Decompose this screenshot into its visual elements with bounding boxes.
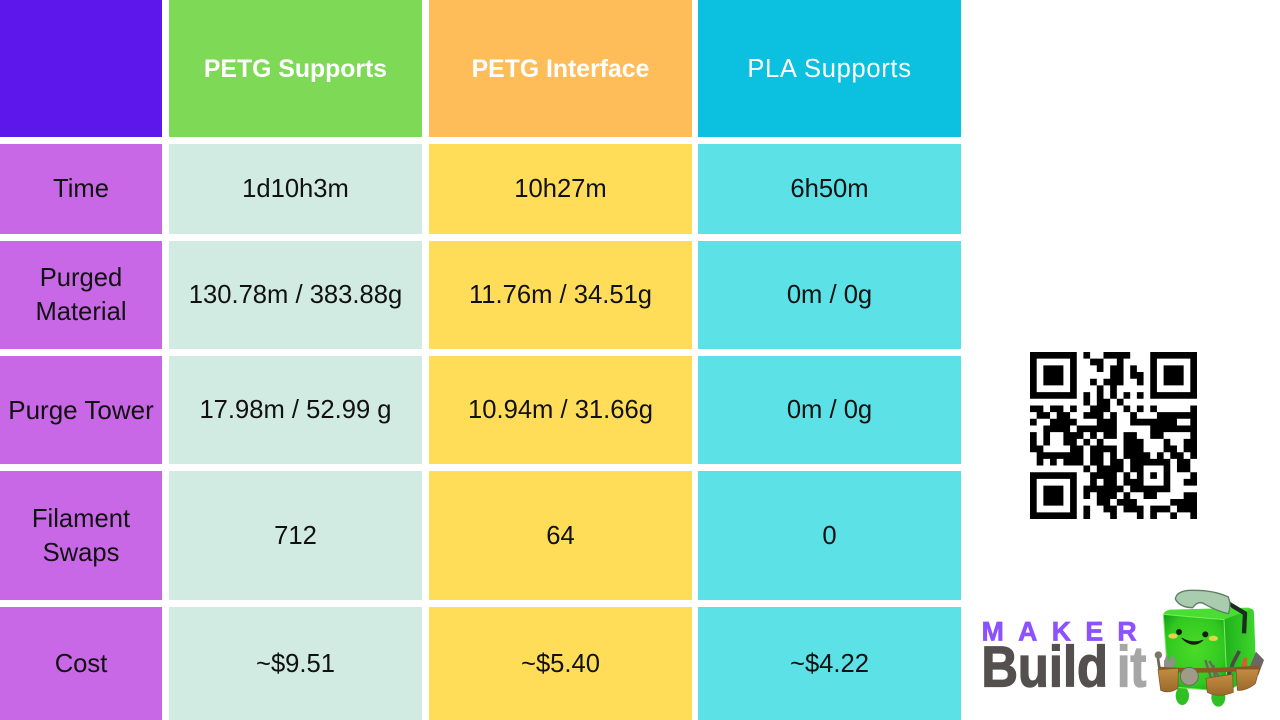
row label: Cost <box>0 607 162 720</box>
PETG Supports filament swaps: 712 <box>274 522 317 550</box>
PETG Supports cost: ~$9.51 <box>256 650 335 678</box>
row label: Cost: Cost <box>55 650 107 678</box>
PETG Interface filament swaps: 64 <box>546 522 575 550</box>
row label: Filament Swaps: Swaps <box>43 538 119 566</box>
PLA Supports purged material: 0m / 0g <box>787 281 872 309</box>
row label: Time <box>0 144 162 234</box>
buckle <box>1180 667 1198 685</box>
pouch: right <box>1236 669 1259 690</box>
header: PETG Supports: PETG Supports <box>204 56 387 82</box>
tool belt <box>1159 668 1260 670</box>
goggles lens <box>1175 590 1230 614</box>
PLA Supports filament swaps <box>698 471 961 600</box>
PETG Supports purged material <box>169 241 422 349</box>
row label: Filament Swaps <box>0 471 162 600</box>
pliers <box>1164 653 1176 673</box>
logo text: it: it <box>1117 635 1146 699</box>
PETG Supports time: 1d10h3m <box>242 175 349 203</box>
PETG Interface cost <box>429 607 692 720</box>
PETG Interface purged material <box>429 241 692 349</box>
PLA Supports purged material <box>698 241 961 349</box>
tools <box>1205 660 1221 680</box>
goggles strap <box>1228 603 1245 633</box>
row label: Purged Material <box>0 241 162 349</box>
PLA Supports time: 6h50m <box>790 175 869 203</box>
PLA Supports cost: ~$4.22 <box>790 650 869 678</box>
mascot: green cube with goggles and tool belt <box>1155 590 1264 707</box>
header: PLA Supports <box>698 0 961 137</box>
PLA Supports purge tower <box>698 356 961 464</box>
PETG Supports purged material: 130.78m / 383.88g <box>189 281 402 309</box>
PETG Supports filament swaps <box>169 471 422 600</box>
logo text: MAKER: MAKER <box>982 617 1137 647</box>
pouch: centre <box>1206 674 1233 695</box>
cube front face <box>1163 614 1227 692</box>
PLA Supports cost <box>698 607 961 720</box>
header: PLA Supports: PLA Supports <box>747 55 912 83</box>
logo text: Build: Build <box>981 635 1108 699</box>
PETG Interface purge tower <box>429 356 692 464</box>
pouch: left <box>1158 668 1178 692</box>
header: PETG Supports <box>169 0 422 137</box>
header: PETG Interface <box>429 0 692 137</box>
row label: Purge Tower: Purge Tower <box>8 395 154 425</box>
PETG Interface purged material: 11.76m / 34.51g <box>469 281 652 309</box>
row label: Time: Time <box>53 175 109 203</box>
PLA Supports purge tower: 0m / 0g <box>787 396 872 424</box>
cube right face <box>1224 609 1256 692</box>
row label: Purged Material: Purged <box>40 264 122 292</box>
header: PETG Interface: PETG Interface <box>472 56 649 82</box>
row label: Filament Swaps: Filament <box>32 504 130 532</box>
PETG Interface time <box>429 144 692 234</box>
PETG Interface cost: ~$5.40 <box>521 650 600 678</box>
PLA Supports time <box>698 144 961 234</box>
PETG Supports purge tower <box>169 356 422 464</box>
PETG Supports cost <box>169 607 422 720</box>
header: blank corner cell <box>0 0 162 137</box>
logo: Maker Build it <box>981 590 1264 707</box>
PETG Supports purge tower: 17.98m / 52.99 g <box>199 396 392 424</box>
PLA Supports filament swaps: 0 <box>822 522 837 550</box>
PETG Interface purge tower: 10.94m / 31.66g <box>468 396 653 424</box>
face <box>1176 629 1182 635</box>
icon: QR code <box>1030 352 1197 519</box>
PETG Interface time: 10h27m <box>514 175 607 203</box>
row label: Purged Material: Material <box>35 298 127 326</box>
PETG Interface filament swaps <box>429 471 692 600</box>
row label: Purge Tower <box>0 356 162 464</box>
feet <box>1176 686 1189 705</box>
cube top <box>1163 608 1253 620</box>
PETG Supports time <box>169 144 422 234</box>
